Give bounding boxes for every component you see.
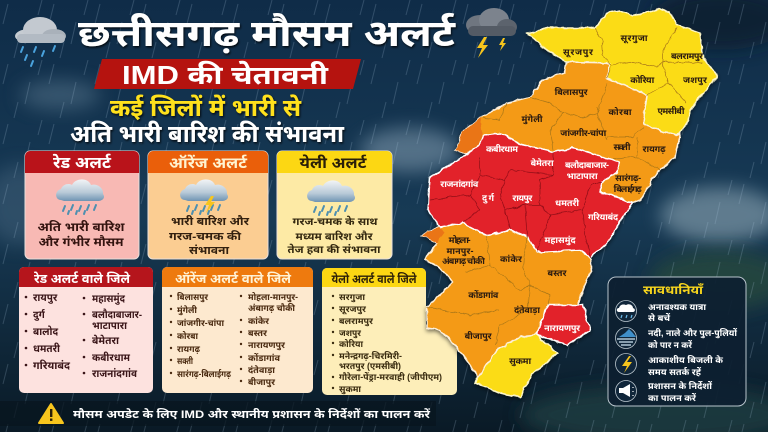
panel: orange alert districts: बिलासपुर xyxy=(177,291,209,303)
panel: orange alert districts: सारंगढ़-बिलाईगढ़ xyxy=(177,368,232,380)
map: district labels: बलौदाबाजार- xyxy=(565,159,609,170)
panel: yellow alert districts: सुकमा xyxy=(339,384,361,395)
footer bar xyxy=(0,401,436,426)
map: district labels: मुंगेली xyxy=(522,112,543,125)
panel: yellow alert districts: जशपुर xyxy=(339,328,362,339)
panel: red alert districts: राजनांदगांव xyxy=(92,368,138,380)
panel: yellow alert districts: सूरजपुर xyxy=(339,304,367,315)
panel: red alert: रेड अलर्ट xyxy=(52,153,112,172)
panel: orange alert xyxy=(148,151,268,259)
map: district labels: धमतरी xyxy=(555,197,579,208)
panel: orange alert districts: बीजापुर xyxy=(248,376,276,388)
map: district labels: मोहला- xyxy=(449,234,471,245)
banner: IMD warning xyxy=(94,59,361,90)
panel: red alert districts: गरियाबंद xyxy=(33,360,70,372)
subheading: अति भारी बारिश की संभावना xyxy=(70,120,345,148)
panel: orange alert districts: अंबागढ़ चौकी xyxy=(248,302,295,314)
map: district labels: अंबागढ़ चौकी xyxy=(442,255,485,267)
panel: precautions: आकाशीय बिजली के xyxy=(648,353,724,365)
icon: flooded river xyxy=(616,328,636,348)
panel: orange alert districts: दंतेवाड़ा xyxy=(248,363,275,376)
panel: yellow alert districts xyxy=(322,268,457,395)
map: district shapes xyxy=(422,9,717,397)
map: district labels: भाटापारा xyxy=(567,171,598,181)
panel: orange alert districts xyxy=(162,267,313,393)
panel: precautions: का पालन करें xyxy=(648,392,697,403)
map: district labels: सारंगढ़- xyxy=(615,172,641,184)
panel: red alert districts xyxy=(19,267,153,393)
panel: orange alert districts: जांजगीर-चांपा xyxy=(177,317,224,328)
panel: precautions: सावधानियाँ xyxy=(643,282,704,297)
map: district labels: राजनांदगांव xyxy=(440,178,479,189)
map: district labels: बेमेतरा xyxy=(531,156,554,168)
panel: orange alert districts: नारायणपुर xyxy=(248,340,286,351)
panel: orange alert districts: मोहला-मानपुर- xyxy=(248,291,298,303)
panel: yellow alert districts: गौरेला-पेंड्रा-मरवाही (जीपीएम) xyxy=(339,370,442,383)
map of Chhattisgarh xyxy=(422,9,717,397)
panel: orange alert: संभावना xyxy=(189,244,230,257)
panel: yellow alert: गरज-चमक के साथ xyxy=(292,215,379,228)
panel: yellow alert: येली अलर्ट xyxy=(300,154,368,172)
panel: red alert districts: दुर्ग xyxy=(33,309,46,321)
map: district labels: मानपुर- xyxy=(446,246,474,257)
panel: orange alert: ऑरेंज अलर्ट xyxy=(169,154,248,172)
map: district labels: एमसीबी xyxy=(658,105,685,116)
panel: precautions: अनावश्यक यात्रा xyxy=(648,302,706,312)
panel: red alert districts: धमतरी xyxy=(33,343,61,355)
subheading: कई जिलों में भारी से xyxy=(110,94,302,122)
footer bar: मौसम अपडेट के लिए IMD और स्थानीय प्रशासन के निर्देशों का पालन करें xyxy=(73,407,431,421)
panel: red alert districts: कबीरधाम xyxy=(92,352,130,364)
panel: orange alert districts: कोंडागांव xyxy=(248,352,281,363)
panel: yellow alert: तेज हवा की संभावना xyxy=(288,243,382,256)
panel: red alert districts: रायपुर xyxy=(33,293,58,304)
map: district labels: कबीरधाम xyxy=(486,143,518,154)
panel: red alert districts: रेड अलर्ट वाले जिले xyxy=(34,271,130,286)
map: district labels: दुर्ग xyxy=(482,192,495,204)
map: district labels: कांकेर xyxy=(500,252,523,264)
panel: yellow alert districts: मनेन्द्रगढ़-चिरमिरी- xyxy=(339,349,402,362)
panel: precautions: प्रशासन के निर्देशों xyxy=(648,379,713,391)
icon: storm cloud right of title xyxy=(466,8,517,58)
panel: precautions xyxy=(608,277,746,406)
icon: lightning xyxy=(616,354,636,374)
map: district labels: सूरजपुर xyxy=(563,47,594,58)
panel: red alert districts: महासमुंद xyxy=(92,293,125,305)
panel: orange alert districts: रायगढ़ xyxy=(177,344,201,355)
map: district labels: जशपुर xyxy=(683,75,708,86)
map: district labels: बिलासपुर xyxy=(555,86,589,98)
panel: red alert: अति भारी बारिश xyxy=(38,219,125,234)
panel: yellow alert districts: कोरिया xyxy=(339,338,363,349)
panel: precautions: नदी, नाले और पुल-पुलियों xyxy=(648,326,738,339)
panel: yellow alert districts: येलो अलर्ट वाले जिले xyxy=(332,271,417,286)
map: district labels: गरियाबंद xyxy=(588,211,619,222)
panel: orange alert districts: ऑरेंज अलर्ट वाले जिले xyxy=(175,271,291,286)
map: district labels: दंतेवाड़ा xyxy=(514,303,540,316)
panel: yellow alert districts: भरतपुर (एमसीबी) xyxy=(339,360,401,372)
panel: orange alert districts: बस्तर xyxy=(248,328,268,338)
banner: IMD warning: IMD की चेतावनी xyxy=(122,60,330,90)
panel: red alert xyxy=(25,151,139,259)
map: district labels: सुकमा xyxy=(509,356,532,367)
map: district labels: कोरबा xyxy=(608,106,632,117)
panel: red alert districts: भाटापारा xyxy=(92,321,128,332)
map: district labels: रायगढ़ xyxy=(643,144,666,155)
icon: warning triangle xyxy=(39,404,63,423)
map: district labels: बिलाईगढ़ xyxy=(614,183,642,195)
panel: precautions: को पार न करें xyxy=(648,339,693,350)
map: district labels: सक्ती xyxy=(614,141,631,152)
map: district labels: बस्तर xyxy=(548,268,568,278)
panel: red alert districts: बलौदाबाजार- xyxy=(92,309,142,321)
map: district labels: रायपुर xyxy=(512,193,533,204)
panel: red alert districts: बालोद xyxy=(33,326,58,338)
panel: orange alert: भारी बारिश और xyxy=(171,215,250,228)
panel: orange alert: गरज-चमक की xyxy=(169,230,242,243)
panel: red alert: और गंभीर मौसम xyxy=(38,234,124,249)
panel: orange alert districts: कांकेर xyxy=(248,314,270,326)
title: छत्तीसगढ़ मौसम अलर्ट xyxy=(78,12,456,54)
map: district labels xyxy=(440,33,708,367)
panel: yellow alert districts: बलरामपुर xyxy=(339,316,374,327)
panel: orange alert districts: सक्ती xyxy=(177,355,193,366)
panel: orange alert districts: कोरबा xyxy=(177,330,198,341)
panel: red alert districts: बेमेतरा xyxy=(92,334,120,347)
map: district labels: कोंडागांव xyxy=(468,289,499,300)
subheading xyxy=(70,94,345,148)
map: district labels: नारायणपुर xyxy=(544,323,581,334)
map: district labels: कोरिया xyxy=(630,74,655,85)
map: district labels: सूरगुजा xyxy=(620,33,648,44)
map: district labels: महासमुंद xyxy=(544,234,576,246)
icon: rain cloud xyxy=(616,300,636,322)
panel: precautions: समय सतर्क रहें xyxy=(648,366,702,377)
map: district labels: जांजगीर-चांपा xyxy=(560,127,607,138)
icon: megaphone xyxy=(616,380,636,402)
panel: precautions: से बचें xyxy=(648,311,671,323)
panel: yellow alert xyxy=(277,151,392,259)
panel: yellow alert: मध्यम बारिश और xyxy=(296,231,373,243)
panel: orange alert districts: मुंगेली xyxy=(177,303,197,316)
icon: rain cloud left of title xyxy=(15,17,66,66)
map: district labels: बलरामपुर xyxy=(671,51,704,62)
panel: yellow alert districts: सरगुजा xyxy=(339,292,365,303)
map: district labels: बीजापुर xyxy=(465,330,493,342)
